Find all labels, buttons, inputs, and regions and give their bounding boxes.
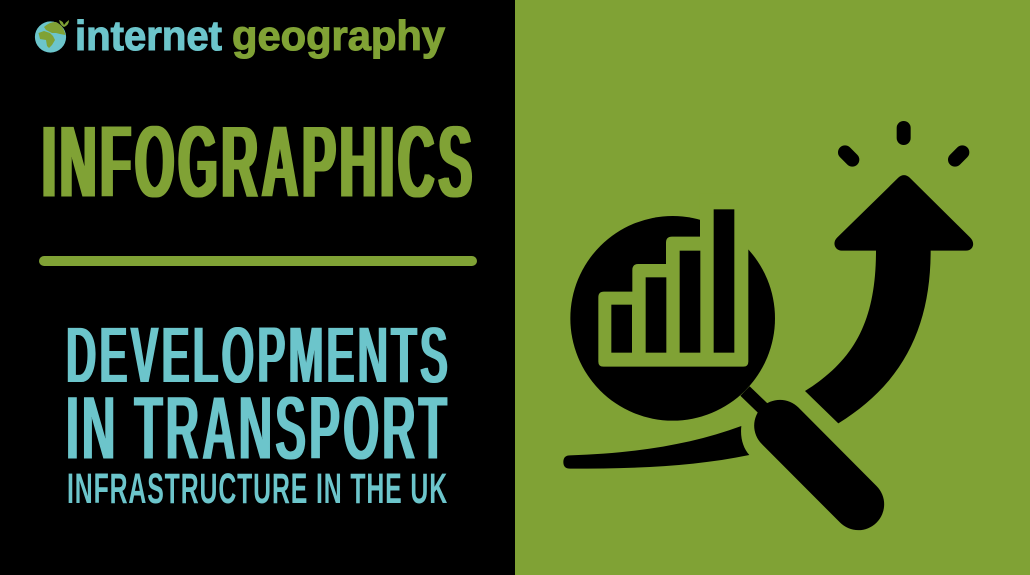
title line: developments: DEVELOPMENTS	[66, 310, 451, 401]
icon: globe	[35, 20, 69, 53]
panel: black left background	[0, 0, 515, 575]
infographic canvas: INFOGRAPHICS	[42, 104, 476, 220]
icon: spark lines	[845, 128, 962, 160]
title block	[66, 310, 451, 513]
icon: magnifying glass over bar chart with rising arrow	[563, 128, 973, 504]
logo word: geography: geography	[232, 12, 446, 59]
logo word: internet: internet	[75, 12, 222, 59]
lens: black circle	[570, 216, 775, 421]
logo: internet geography	[35, 12, 446, 59]
magnifier handle	[780, 426, 858, 504]
magnifier neck	[745, 391, 764, 409]
subtitle line: infrastructure in the UK: INFRASTRUCTURE IN THE UK	[67, 465, 448, 513]
title line: in transport: IN TRANSPORT	[66, 378, 450, 480]
chart backing	[598, 193, 748, 367]
divider bar	[39, 256, 477, 266]
arrow tail: curve	[563, 426, 749, 469]
arrow: rising curve	[805, 175, 973, 423]
bar chart	[611, 209, 734, 353]
panel: green right background	[515, 0, 1030, 575]
